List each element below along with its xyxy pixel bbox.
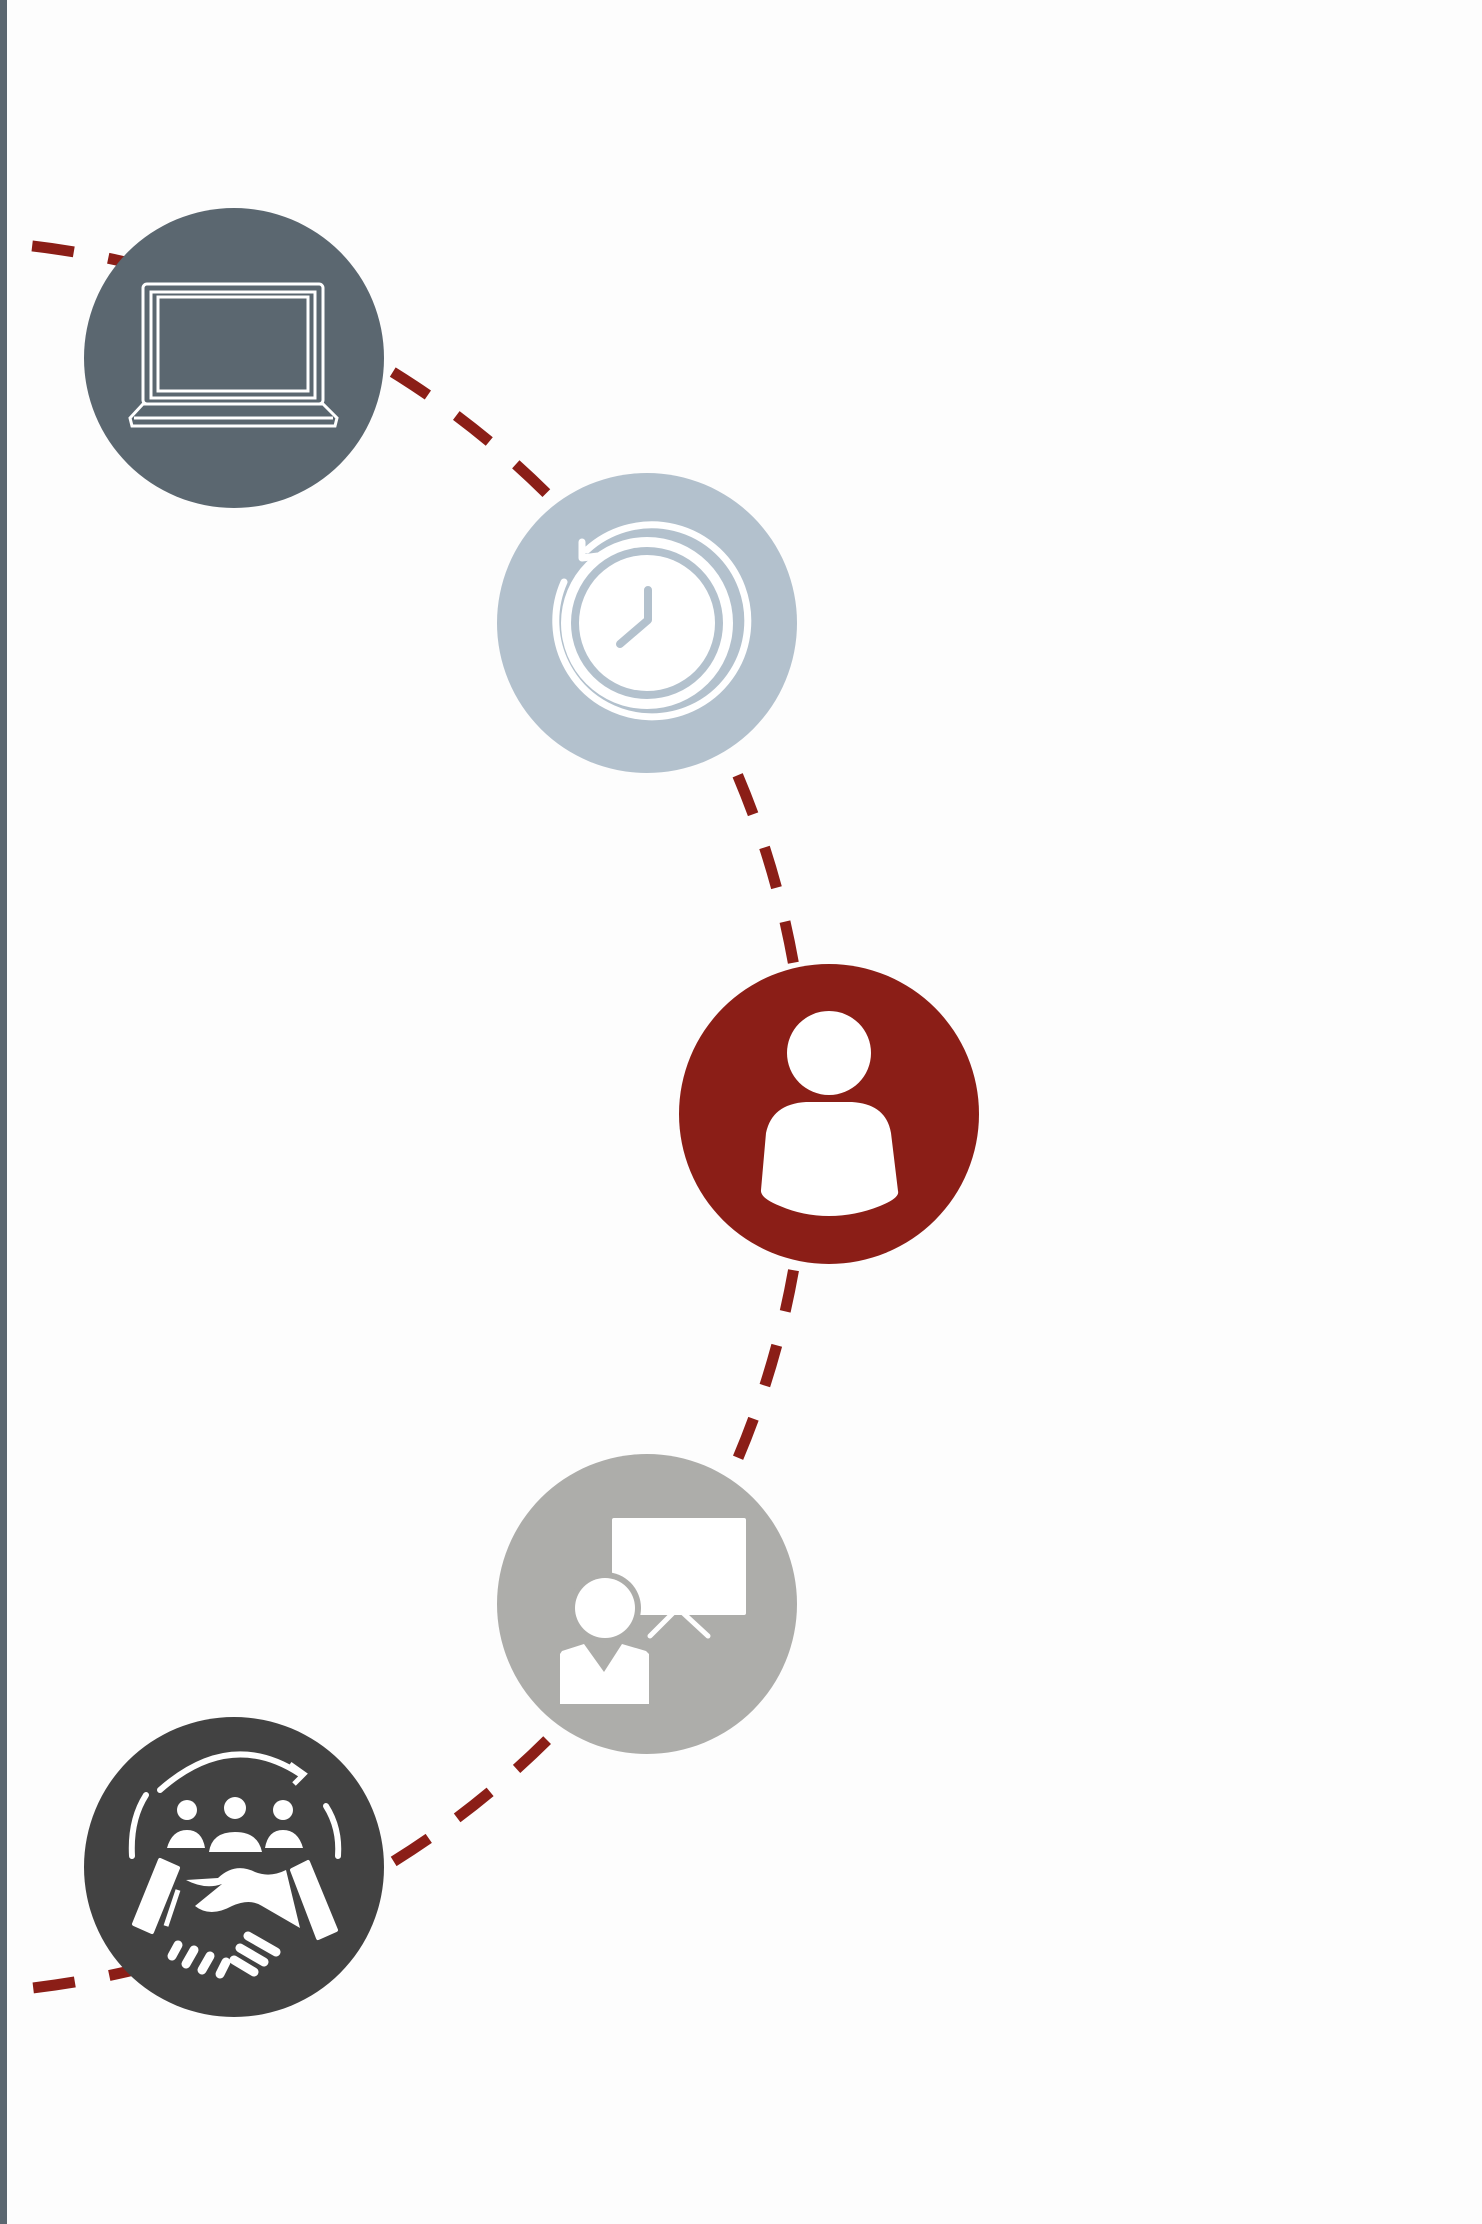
icon: person <box>761 1011 898 1216</box>
step 2: clock <box>497 473 797 773</box>
step 4: presentation <box>497 1454 797 1754</box>
left edge bar <box>0 0 7 2224</box>
dashed arc path <box>0 240 807 1994</box>
step 1: laptop <box>84 208 384 508</box>
icon: laptop <box>130 284 337 426</box>
icon: clock <box>556 525 748 717</box>
icon: handshake with team <box>132 1754 338 1974</box>
step 3: person <box>679 964 979 1264</box>
icon: presenter with board <box>560 1518 746 1704</box>
step 5: handshake <box>84 1717 384 2017</box>
